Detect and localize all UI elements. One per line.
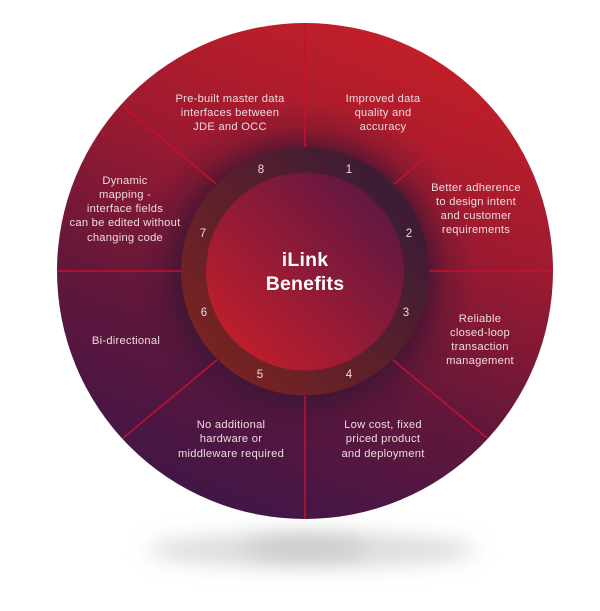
benefit 5: middleware required	[178, 448, 284, 460]
benefit 3: transaction	[451, 341, 509, 353]
ring numbers: 2	[406, 228, 412, 240]
benefits wheel	[57, 23, 553, 519]
benefit 2: and customer	[441, 210, 511, 222]
benefit 2: requirements	[442, 224, 510, 236]
centre disc	[206, 172, 404, 370]
benefit 8: JDE and OCC	[193, 121, 267, 133]
centre title: Benefits	[266, 273, 344, 295]
benefit 6: Bi-directional	[92, 335, 160, 347]
benefit 4: priced product	[346, 433, 421, 445]
benefit 7: can be edited without	[70, 217, 181, 229]
benefit 1: quality and	[355, 107, 411, 119]
numbered ring	[181, 148, 429, 396]
ring numbers: 1	[346, 164, 352, 176]
benefit 4: Low cost, fixed	[344, 419, 422, 431]
outer disc	[57, 23, 553, 519]
benefit 3: Reliable	[459, 313, 501, 325]
ring numbers: 3	[403, 307, 409, 319]
benefit 7: changing code	[87, 232, 163, 244]
benefit 7: mapping -	[99, 189, 151, 201]
ring numbers: 8	[258, 164, 264, 176]
ring numbers: 7	[200, 228, 206, 240]
segment dividers	[57, 23, 553, 519]
ring numbers: 6	[201, 307, 207, 319]
ring numbers: 5	[257, 369, 263, 381]
benefit 2: to design intent	[436, 196, 517, 208]
centre title	[266, 249, 344, 295]
benefit 5: No additional	[197, 419, 265, 431]
ring numbers: 4	[346, 369, 353, 381]
benefit 1: Improved data	[346, 93, 421, 105]
benefit 2: Better adherence	[431, 182, 521, 194]
ring numbers	[200, 164, 412, 381]
ground shadow	[147, 533, 477, 567]
benefit 8: interfaces between	[181, 107, 279, 119]
benefit 3: management	[446, 355, 515, 367]
benefit 5: hardware or	[200, 433, 262, 445]
benefit 4: and deployment	[341, 448, 425, 460]
benefit 3: closed-loop	[450, 327, 510, 339]
centre title: iLink	[282, 249, 328, 271]
benefit 7: interface fields	[87, 203, 163, 215]
benefit 8: Pre-built master data	[175, 93, 285, 105]
benefit 7: Dynamic	[102, 175, 148, 187]
ring soft shadow	[135, 102, 475, 442]
benefit 1: accuracy	[360, 121, 407, 133]
